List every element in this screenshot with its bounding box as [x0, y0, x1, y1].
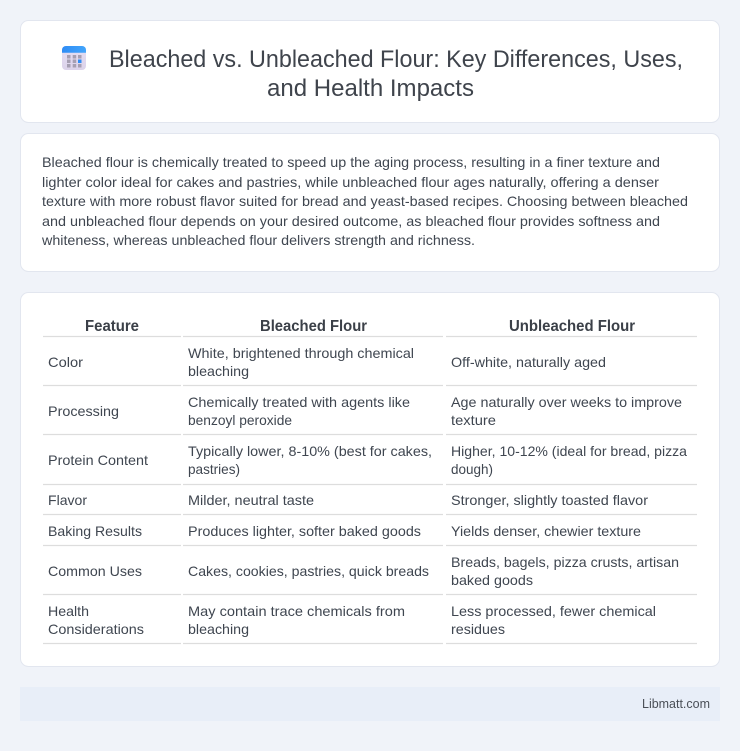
row: common uses: Cakes, cookies, pastries, quick breads	[188, 563, 429, 579]
row: common uses: Common Uses	[48, 563, 142, 579]
row: common uses: Breads, bagels, pizza crusts, artisan	[451, 554, 679, 570]
row: baking results: Baking Results	[48, 523, 142, 539]
row: protein content: Higher, 10-12% (ideal for bread, pizza	[451, 443, 687, 459]
row: processing: Processing	[48, 403, 119, 419]
row: protein content: dough)	[451, 461, 493, 477]
title: Bleached vs. Unbleached Flour: Key Differences, Uses,	[109, 46, 683, 73]
row: color: Off-white, naturally aged	[451, 354, 606, 370]
footer bar	[20, 687, 720, 721]
intro text: whiteness, whereas unbleached flour delivers strength and richness.	[41, 232, 475, 248]
row: processing: Chemically treated with agents like	[188, 394, 410, 410]
row: protein content: pastries)	[188, 461, 240, 477]
intro text: Bleached flour is chemically treated to speed up the aging process, resulting in a finer texture and	[42, 154, 660, 170]
row: protein content: Typically lower, 8-10% (best for cakes,	[188, 443, 432, 459]
table header row: Bleached Flour	[260, 318, 367, 335]
row: color: Color	[48, 354, 83, 370]
row: flavor: Flavor	[48, 492, 87, 508]
row: processing: texture	[451, 412, 496, 428]
row: protein content	[48, 443, 687, 477]
row: baking results	[48, 523, 641, 539]
row: common uses	[48, 554, 679, 588]
row: flavor: Milder, neutral taste	[188, 492, 314, 508]
row: health considerations: residues	[451, 621, 505, 637]
row: common uses: baked goods	[451, 572, 533, 588]
row: flavor: Stronger, slightly toasted flavor	[451, 492, 648, 508]
row: color: bleaching	[188, 363, 249, 379]
icon: calendar grid	[62, 46, 86, 70]
intro text: texture with more robust flavor suited for bread and yeast-based recipes. Choosing between bleached	[42, 193, 688, 209]
row: color: White, brightened through chemical	[188, 345, 414, 361]
row: processing: benzoyl peroxide	[188, 412, 292, 428]
row: protein content: Protein Content	[48, 452, 148, 468]
intro text: lighter color ideal for cakes and pastries, while unbleached flour ages naturally, offering a denser	[42, 174, 659, 190]
header panel	[20, 20, 720, 122]
intro text	[41, 154, 688, 248]
title	[109, 46, 683, 102]
intro panel	[20, 134, 720, 272]
intro text: and unbleached flour depends on your desired outcome, as bleached flour provides softness and	[42, 213, 660, 229]
table rules	[43, 336, 697, 644]
row: health considerations: Less processed, fewer chemical	[451, 603, 656, 619]
row: health considerations	[48, 603, 656, 637]
footer credit: Libmatt.com	[642, 697, 710, 711]
table header row	[85, 318, 635, 335]
row: health considerations: bleaching	[188, 621, 249, 637]
row: health considerations: Health	[48, 603, 89, 619]
table header row: Feature	[85, 318, 139, 335]
title: and Health Impacts	[267, 75, 474, 102]
table panel	[20, 292, 720, 666]
row: color	[48, 345, 606, 379]
row: processing	[48, 394, 682, 428]
row: health considerations: Considerations	[48, 621, 144, 637]
row: flavor	[48, 492, 648, 508]
row: processing: Age naturally over weeks to improve	[451, 394, 682, 410]
row: baking results: Produces lighter, softer baked goods	[188, 523, 421, 539]
row: baking results: Yields denser, chewier texture	[451, 523, 641, 539]
table header row: Unbleached Flour	[509, 318, 635, 335]
row: health considerations: May contain trace chemicals from	[188, 603, 405, 619]
